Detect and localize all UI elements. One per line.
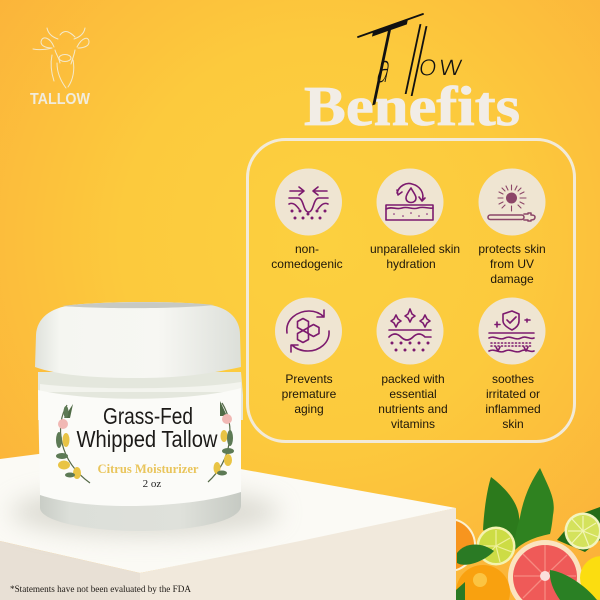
orange slice	[422, 518, 476, 572]
label subtitle: Citrus Moisturizer	[98, 462, 199, 476]
label: comedogenic	[271, 257, 343, 271]
icon: hexagons cycle	[275, 298, 342, 364]
icon: pores arrows	[275, 168, 342, 236]
icon: sparkles over skin	[376, 298, 444, 364]
grapefruit	[508, 540, 582, 600]
brand name: TALLOW	[30, 91, 91, 108]
label size: 2 oz	[143, 478, 161, 490]
label title line 1: Grass-Fed	[103, 403, 193, 429]
oranges and lemon	[456, 556, 600, 600]
title word: Tallow script: ow	[416, 50, 467, 82]
podium top	[0, 445, 456, 573]
podium	[0, 445, 456, 600]
label: nutrients and	[378, 402, 448, 416]
footnote: *Statements have not been evaluated by the FDA	[10, 585, 191, 595]
label: unparalleled skin	[370, 242, 460, 256]
small leaves	[456, 544, 597, 600]
label: damage	[490, 272, 534, 286]
product jar	[35, 302, 243, 531]
title	[304, 0, 520, 138]
jar shadow	[10, 488, 280, 536]
label: aging	[294, 402, 324, 416]
icon: shield over skin	[478, 298, 546, 364]
label: non-	[295, 242, 319, 256]
label: protects skin	[478, 242, 546, 256]
title word: Tallow script: T	[349, 0, 413, 138]
benefit: non-comedogenic	[271, 168, 343, 271]
label: inflammed	[485, 402, 541, 416]
podium right side	[140, 508, 456, 600]
label title line 2: Whipped Tallow	[76, 426, 218, 452]
panel: benefits	[248, 140, 574, 442]
cow line icon	[33, 28, 89, 88]
title word: Benefits: Benefits	[304, 76, 520, 138]
benefit: premature aging	[275, 298, 342, 416]
label: vitamins	[391, 417, 435, 431]
benefit: nutrients	[376, 298, 448, 431]
label: skin	[502, 417, 524, 431]
left laurel	[56, 404, 90, 483]
label: premature	[282, 387, 337, 401]
jar base	[40, 480, 241, 531]
benefit: hydration	[370, 168, 460, 271]
lime slices	[476, 512, 600, 566]
jar label	[38, 388, 241, 506]
title word: Tallow script: a	[373, 48, 395, 92]
icon: sun and dropper	[478, 168, 546, 236]
label: soothes	[492, 372, 534, 386]
label: Prevents	[285, 372, 333, 386]
benefit: soothes skin	[478, 298, 546, 431]
benefit: UV protection	[478, 168, 546, 286]
citrus arrangement	[422, 468, 600, 600]
panel border	[248, 140, 574, 442]
podium left side	[0, 541, 140, 600]
label: essential	[389, 387, 437, 401]
title word: Tallow script: l	[401, 12, 435, 119]
label: irritated or	[486, 387, 540, 401]
jar cap	[35, 302, 241, 378]
right laurel	[208, 401, 234, 482]
label: hydration	[386, 257, 436, 271]
cap top rim	[62, 302, 214, 308]
title word: Tallow script: l	[395, 10, 429, 117]
large leaves	[483, 468, 600, 552]
logo	[30, 28, 91, 108]
label: from UV	[490, 257, 534, 271]
label: packed with	[381, 372, 445, 386]
icon: skin droplet	[376, 168, 444, 236]
jar glass band	[38, 372, 243, 420]
title word: Tallow script	[349, 0, 467, 138]
